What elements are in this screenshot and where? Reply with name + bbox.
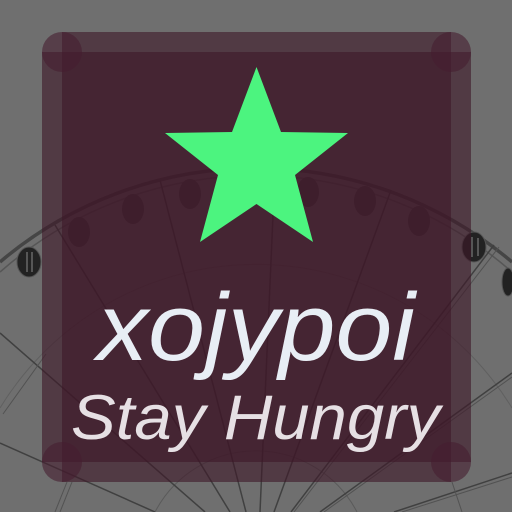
subtitle: Stay Hungry bbox=[71, 383, 444, 453]
panel: rounded plum overlay bbox=[42, 32, 471, 482]
gondolas outside panel bbox=[17, 232, 512, 296]
gondolas behind panel bbox=[68, 177, 430, 247]
title: xojypoi bbox=[93, 274, 418, 381]
icon: green star bbox=[165, 67, 348, 242]
